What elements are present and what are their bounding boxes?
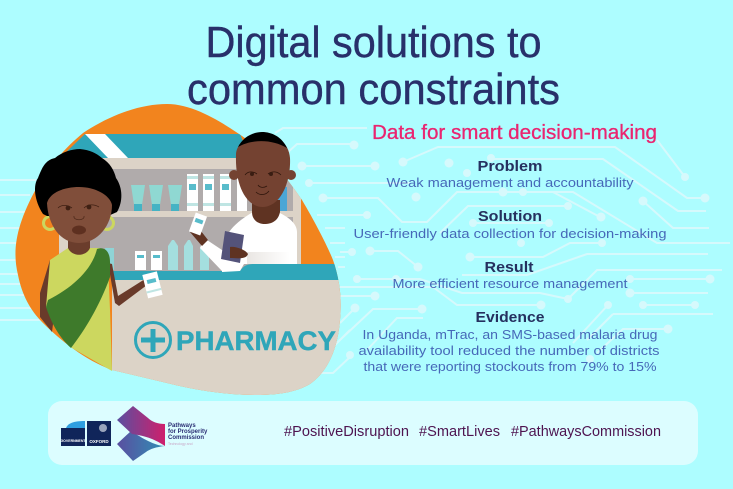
neck [252,200,280,224]
logo: Pathways for Prosperity Commission mark [117,406,165,461]
pharmacy sign: PHARMACY [176,326,336,356]
arms [40,260,56,332]
title [187,18,560,114]
logo: University of Oxford: OXFORD [89,439,109,444]
logo: Pathways for Prosperity Commission wordmark: for Prosperity [168,429,208,435]
medicine box [189,213,207,235]
medicine box [142,271,163,298]
logo: Pathways for Prosperity Commission wordmark [168,423,208,446]
hair [35,149,121,216]
evidence: In Uganda, mTrac, an SMS-based malaria drug [362,327,658,342]
products: bottles [168,240,209,270]
hand [230,247,248,258]
problem [386,158,634,190]
pharmacy sign [136,322,336,358]
circuit board background [0,128,730,373]
result: More efficient resource management [392,276,628,291]
tablet [221,231,244,263]
earrings [44,216,56,230]
figure: pharmacist [189,132,297,272]
dress [46,248,112,371]
shelves [59,158,301,271]
logo: Blavatnik School of Government [60,421,86,446]
hair [238,132,287,148]
problem: Weak management and accountability [386,175,634,190]
logo: Pathways for Prosperity Commission wordmark: Pathways [168,423,196,429]
panel: data for smart decision-making [354,122,666,374]
problem: Problem [478,158,542,175]
title: common constraints [187,65,560,114]
evidence: Evidence [476,309,544,326]
logo: Pathways for Prosperity Commission wordmark: Technology and [168,442,193,446]
footer panel [48,401,698,465]
evidence [358,309,660,374]
hashtags: #PositiveDisruption [284,424,409,440]
evidence: availability tool reduced the number of districts [358,343,660,358]
heading: Data for smart decision-making [372,122,657,144]
orange blob with pharmacy stall [15,104,341,395]
hashtags [284,424,661,440]
logo: Blavatnik School of Government: GOVERNMENT [60,439,86,443]
face [245,172,281,195]
shirt [222,212,297,272]
hashtags: #PathwaysCommission [511,424,661,440]
head [236,133,290,207]
solution: Solution [478,208,542,225]
result [392,259,628,291]
counter [112,264,352,399]
solution: User-friendly data collection for decision-making [354,226,666,241]
products: boxes top [187,174,287,211]
face [58,205,99,234]
products: tubes [131,185,182,211]
head [47,187,112,243]
solution [354,208,666,241]
result: Result [484,259,534,276]
hashtags: #SmartLives [419,424,500,440]
awning [60,134,250,158]
figure: customer [35,149,163,371]
logo: Pathways for Prosperity Commission wordmark: Commission [168,435,204,441]
title: Digital solutions to [206,18,542,67]
illustration: pharmacy scene [15,104,341,395]
sash [46,248,110,348]
evidence: that were reporting stockouts from 79% to 15% [364,359,657,374]
products: boxes bottom [105,248,162,270]
logo: University of Oxford [87,421,111,446]
neck [68,235,90,256]
